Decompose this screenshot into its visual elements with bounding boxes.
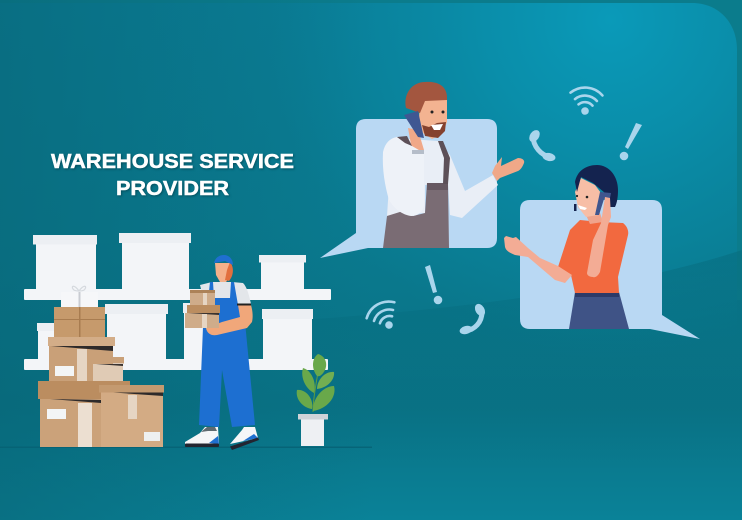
- icon: phone handset lower: [459, 302, 487, 336]
- hand: [492, 157, 524, 181]
- bottom right box: [99, 385, 164, 447]
- woman on the phone: [504, 165, 629, 329]
- stack of cardboard boxes: [38, 286, 164, 447]
- icon: wifi bottom: [363, 297, 405, 336]
- head: [215, 263, 231, 282]
- torso and extended arm: [387, 138, 498, 218]
- gift box: [61, 286, 98, 308]
- raised hand: [408, 128, 424, 150]
- icon: exclamation lower: [425, 265, 442, 304]
- overalls: [199, 282, 255, 427]
- hair: [575, 165, 618, 207]
- phone: [404, 111, 424, 138]
- carried boxes: [185, 290, 220, 328]
- warehouse worker: [185, 255, 259, 450]
- jeans: [569, 292, 629, 329]
- bottom left box: [38, 381, 130, 447]
- title: PROVIDER: [116, 178, 230, 200]
- arm: [206, 305, 253, 335]
- small open box: [93, 357, 124, 381]
- orange top: [558, 220, 628, 293]
- shirt: [200, 282, 251, 306]
- top box: [54, 307, 105, 337]
- man on the phone: [383, 82, 524, 248]
- raised arm: [587, 197, 611, 277]
- warehouse shelves with white boxes: [24, 233, 331, 370]
- icon: phone handset upper: [527, 128, 556, 162]
- potted plant: [297, 354, 335, 446]
- head: [419, 98, 447, 139]
- right speech bubble: [520, 200, 700, 339]
- left arm and hand: [504, 236, 572, 283]
- title: [51, 151, 294, 200]
- phone: [595, 192, 611, 215]
- ground line: [0, 446, 372, 448]
- shoes: [185, 427, 259, 450]
- icon: wifi top: [569, 86, 603, 116]
- overalls: [383, 183, 449, 248]
- neck and face: [586, 213, 603, 224]
- left speech bubble: [320, 119, 497, 258]
- raised arm: [383, 137, 424, 216]
- icon: exclamation upper: [620, 123, 642, 160]
- middle box: [48, 337, 115, 381]
- title: WAREHOUSE SERVICE: [51, 151, 294, 173]
